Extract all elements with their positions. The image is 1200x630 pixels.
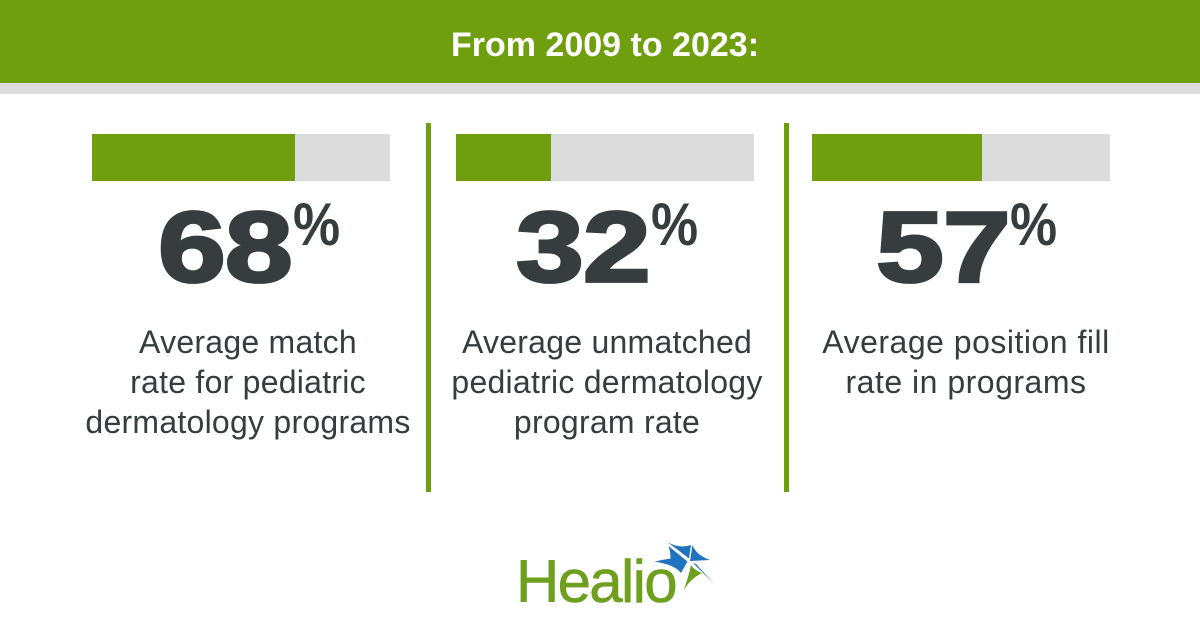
panel: match rate <box>85 134 411 440</box>
logo wordmark: Healio <box>516 548 676 615</box>
stat 68%: 68 <box>158 191 292 303</box>
description: dermatology programs <box>85 404 411 440</box>
progress bar 68% <box>92 134 390 181</box>
description <box>822 324 1110 400</box>
Healio logo <box>516 542 714 615</box>
description <box>451 324 763 440</box>
progress bar 57% <box>812 134 1110 181</box>
stat 57%: 57 <box>876 191 1010 303</box>
description: rate in programs <box>846 364 1086 400</box>
description <box>85 324 411 440</box>
header band <box>0 0 1200 94</box>
description: program rate <box>514 404 700 440</box>
description: rate for pediatric <box>130 364 366 400</box>
title: From 2009 to 2023: <box>451 26 759 64</box>
header green bar <box>0 0 1200 83</box>
stat 68%: % <box>293 192 340 259</box>
description: Average unmatched <box>462 324 752 360</box>
description: Average match <box>139 324 357 360</box>
divider 1 <box>426 123 431 492</box>
stat 32%: 32 <box>516 191 650 303</box>
progress bar 32% <box>456 134 754 181</box>
stat 32%: % <box>651 192 698 259</box>
stat 57%: % <box>1010 192 1057 259</box>
description: pediatric dermatology <box>451 364 763 400</box>
panel: position fill rate <box>812 134 1110 400</box>
panel: unmatched rate <box>451 134 763 440</box>
divider 2 <box>784 123 789 492</box>
icon: star <box>654 542 714 591</box>
description: Average position fill <box>822 324 1110 360</box>
